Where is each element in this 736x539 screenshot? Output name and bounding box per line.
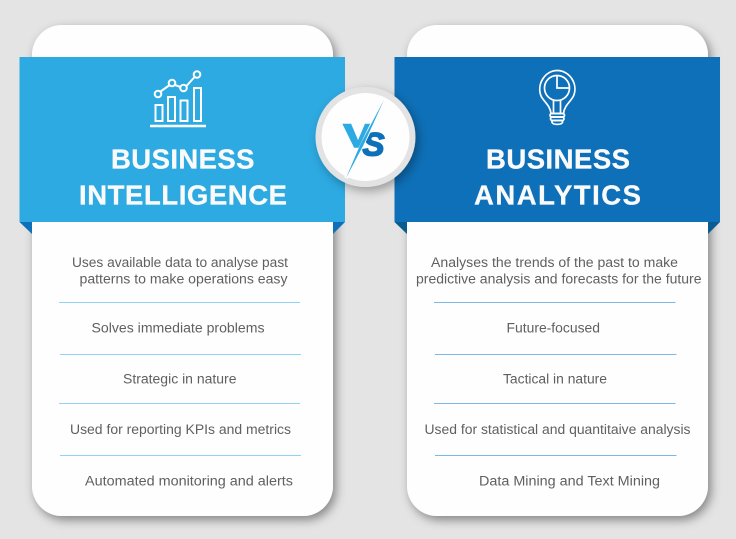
text: future-focused: Future-focused [506, 320, 600, 336]
panel: business intelligence [20, 25, 345, 516]
text: trends and forecasts [416, 255, 702, 288]
panel: business analytics [394, 25, 720, 516]
badge ring [316, 87, 416, 187]
heading: business intelligence: BUSINESS [111, 144, 254, 174]
badge: VS [316, 87, 416, 187]
card: business intelligence [32, 25, 333, 516]
text: statistical analysis: Used for statistical and quantitaive analysis [424, 422, 690, 438]
icon: bar chart with trend line [150, 71, 206, 126]
header band: business intelligence [20, 57, 345, 222]
text: strategic: Strategic in nature [123, 372, 237, 388]
text: data and text mining: Data Mining and Text Mining [479, 474, 660, 490]
card: business analytics [407, 25, 708, 516]
text: trends and forecasts: Analyses the trends of the past to make [431, 255, 678, 271]
heading: business analytics: BUSINESS [486, 144, 630, 174]
icon: light bulb with pie chart [540, 70, 575, 124]
text: past patterns: Uses available data to analyse past [72, 255, 288, 271]
text: trends and forecasts: predictive analysis and forecasts for the future [416, 272, 702, 288]
slash [346, 100, 384, 178]
badge face [322, 93, 410, 181]
letter V: V [344, 118, 373, 154]
heading: business intelligence: INTELLIGENCE [79, 180, 287, 210]
ribbon folds: business intelligence [20, 222, 345, 234]
text: tactical: Tactical in nature [503, 372, 607, 388]
text: past patterns [72, 255, 288, 288]
text: reporting KPIs: Used for reporting KPIs and metrics [70, 422, 291, 438]
heading: business intelligence [79, 144, 287, 210]
ribbon folds: business analytics [394, 222, 720, 234]
text: past patterns: patterns to make operations easy [80, 272, 288, 288]
text: immediate problems: Solves immediate problems [92, 320, 264, 336]
letter S: S [362, 126, 385, 162]
heading: business analytics [474, 144, 641, 210]
header band: business analytics [394, 57, 720, 222]
text: automated monitoring: Automated monitoring and alerts [85, 474, 293, 490]
heading: business analytics: ANALYTICS [474, 180, 641, 210]
